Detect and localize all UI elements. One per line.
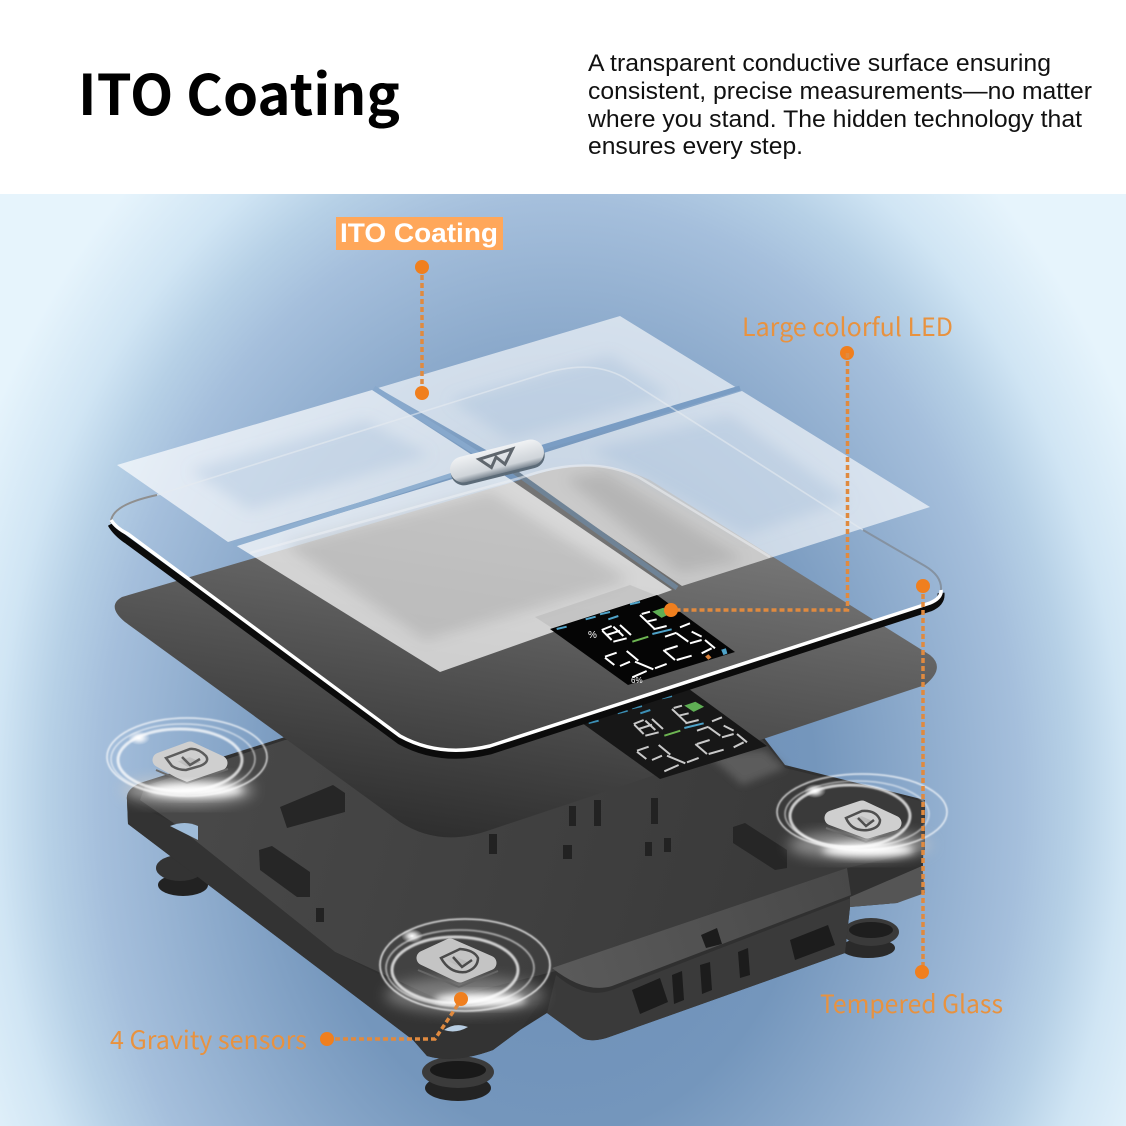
ghost display area [535, 585, 655, 628]
front right wall [547, 898, 851, 1040]
base floor [140, 705, 925, 1000]
title: ITO Coating [78, 51, 400, 132]
display percent icon: % [588, 630, 597, 641]
sheet cross bars [233, 388, 740, 588]
post pegs [316, 798, 671, 922]
callout: ITO Coating: ITO Coating [340, 218, 498, 248]
tempered glass panel [111, 367, 941, 755]
sheet pads [285, 472, 745, 640]
foot: left [156, 855, 208, 896]
far edge highlight [705, 750, 785, 785]
inner ribs [259, 785, 787, 897]
description text: consistent, precise measurements—no matter [588, 78, 1092, 105]
foot: front [422, 1056, 494, 1101]
callout: Large colorful LED [664, 308, 953, 617]
callout: Large colorful LED: Large colorful LED [742, 308, 953, 344]
logo button [447, 437, 547, 488]
callout: 4 Gravity sensors: 4 Gravity sensors [110, 1021, 307, 1057]
display units: 6% [631, 676, 643, 685]
glass bright edge [111, 524, 941, 755]
sheet quadrant top left [117, 390, 486, 542]
callout: 4 Gravity sensors [110, 992, 468, 1057]
sheet quadrant bottom [235, 467, 672, 672]
sheet quadrant right [505, 391, 930, 586]
sensor C [380, 919, 550, 1013]
ITO coating sheet [117, 316, 930, 672]
vents [632, 925, 835, 1014]
corner ear [850, 866, 925, 907]
callout: Tempered Glass: Tempered Glass [820, 985, 1003, 1021]
front right rim [552, 868, 851, 988]
base hole left [170, 823, 198, 840]
lower LED display [582, 689, 767, 779]
description text: where you stand. The hidden technology that [587, 106, 1082, 133]
sensor A [107, 718, 267, 804]
header white band [0, 0, 1126, 194]
sensor B [777, 774, 947, 859]
dark film layer [115, 466, 937, 837]
callout: Tempered Glass [820, 579, 1003, 1021]
foot: right [841, 918, 899, 958]
description text [587, 50, 1092, 160]
callout: ITO Coating [336, 217, 503, 400]
left wall [127, 800, 540, 1059]
base hole front [444, 1025, 468, 1031]
film top edge [250, 466, 770, 557]
sheet quadrant top right [378, 316, 737, 458]
upper LED display [550, 595, 735, 685]
base body [127, 700, 925, 1059]
description text: ensures every step. [588, 133, 803, 160]
description text: A transparent conductive surface ensuring [588, 50, 1051, 77]
scale base with feet and sensors [107, 700, 947, 1101]
